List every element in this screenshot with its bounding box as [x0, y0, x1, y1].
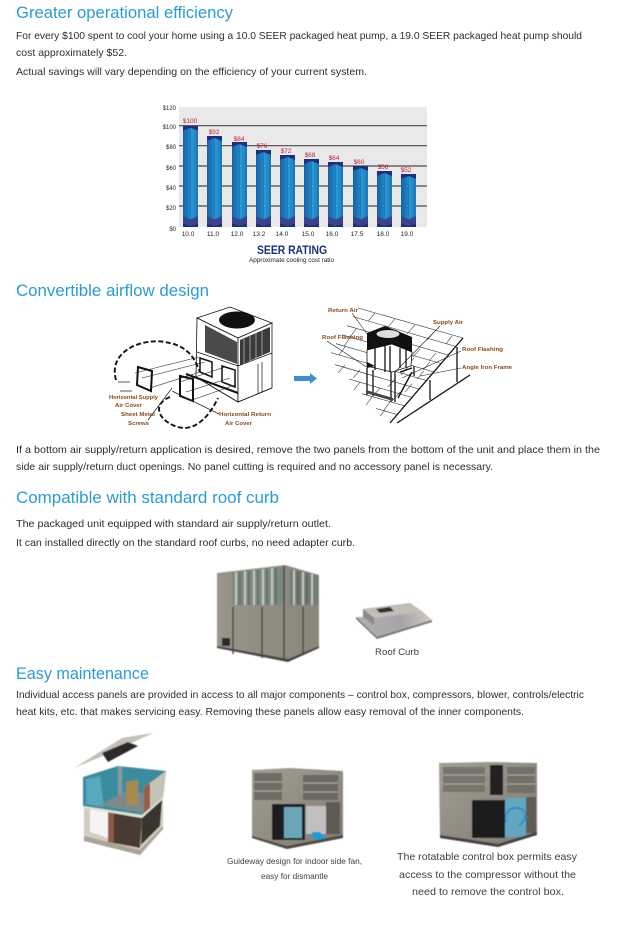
- x axis labels: 10.0: [182, 231, 195, 238]
- caption: guideway design: easy for dismantle: [261, 871, 328, 881]
- y axis labels: $40: [166, 186, 177, 192]
- caption: Roof Curb: Roof Curb: [375, 647, 419, 658]
- heading: Compatible with standard roof curb: Compatible with standard roof curb: [16, 488, 279, 507]
- bars: [183, 126, 416, 227]
- y axis labels: $100: [163, 125, 177, 131]
- bar value labels: $64: [329, 155, 340, 162]
- diagram: unit with removable panels: [115, 307, 272, 428]
- labels: panel diagram: Air Cover: [225, 421, 253, 427]
- photo: guideway fan unit: [252, 768, 343, 849]
- labels: panel diagram: Horizontal Return: [219, 412, 272, 418]
- labels: panel diagram: Horizontal Supply: [109, 395, 159, 401]
- text block: roof curb compatibility: The packaged unit equipped with standard air supply/return outlet.: [16, 518, 331, 530]
- caption: rotatable control box: access to the compressor without the: [399, 869, 576, 881]
- photo: packaged unit: [217, 565, 319, 662]
- labels: panel diagram: Screws: [128, 421, 149, 427]
- x axis labels: 13.2: [253, 231, 266, 238]
- text block: conversion explanation: If a bottom air supply/return application is desired, remove the two panels from the bottom of the unit and place them in the: [16, 444, 600, 456]
- heading: Convertible airflow design: Convertible airflow design: [16, 281, 209, 300]
- text block: maintenance intro: heat kits, etc. that makes servicing easy. Removing these panels allow easy removal of the inner components.: [16, 706, 524, 718]
- bar value labels: $92: [209, 129, 220, 136]
- y axis labels: $0: [169, 227, 177, 233]
- x axis labels: 16.0: [326, 231, 339, 238]
- x axis labels: [182, 231, 414, 238]
- bar value labels: $52: [401, 167, 412, 174]
- x axis labels: 17.5: [351, 231, 364, 238]
- y axis labels: $80: [166, 145, 177, 151]
- bar value labels: $100: [183, 118, 198, 125]
- y axis labels: $20: [166, 206, 177, 212]
- labels: panel diagram: Air Cover: [115, 403, 143, 409]
- text block: conversion explanation: side air supply/return duct openings. No panel cutting is required and no accessory panel is necessary.: [16, 461, 493, 473]
- bar value labels: $72: [281, 148, 292, 155]
- diagram: unit on pitched roof: [327, 308, 470, 423]
- text block: efficiency intro: [16, 30, 582, 78]
- text block: roof curb compatibility: [16, 518, 355, 549]
- text block: efficiency intro: cost approximately $52.: [16, 47, 127, 59]
- x axis labels: 11.0: [207, 231, 219, 238]
- bar value labels: $68: [305, 152, 316, 159]
- text block: conversion explanation: [16, 444, 600, 473]
- photo: open unit cutaway: [74, 733, 166, 855]
- labels: roof diagram: [322, 308, 512, 371]
- y axis labels: [163, 106, 177, 233]
- labels: panel diagram: Sheet Metal: [121, 412, 155, 418]
- axis title: SEER RATING: [257, 243, 327, 257]
- y axis labels: $120: [163, 106, 177, 112]
- labels: roof diagram: Return Air: [328, 308, 359, 314]
- heading: Greater operational efficiency: Greater operational efficiency: [16, 3, 233, 22]
- caption: rotatable control box: The rotatable control box permits easy: [397, 851, 578, 863]
- text block: maintenance intro: [16, 689, 584, 718]
- caption: rotatable control box: need to remove the control box.: [412, 886, 564, 898]
- labels: panel diagram: [109, 395, 272, 427]
- labels: roof diagram: Angle Iron Frame: [462, 365, 512, 371]
- labels: roof diagram: Roof Flashing: [322, 335, 364, 341]
- photo: roof curb: [356, 603, 432, 639]
- x axis labels: 12.0: [231, 231, 244, 238]
- caption: guideway design: [227, 856, 362, 881]
- text block: maintenance intro: Individual access panels are provided in access to all major components – control box, compressors, blower, controls/electric: [16, 689, 584, 701]
- bar value labels: $56: [378, 164, 389, 171]
- photo: rotatable control box unit: [439, 762, 537, 847]
- bar value labels: $84: [234, 136, 245, 143]
- bar value labels: $60: [354, 159, 365, 166]
- labels: roof diagram: Roof Flashing: [462, 347, 504, 353]
- y axis labels: $60: [166, 166, 177, 172]
- labels: roof diagram: Supply Air: [433, 320, 464, 326]
- bar value labels: [183, 118, 412, 174]
- caption: rotatable control box: [397, 851, 578, 898]
- x axis labels: 14.0: [276, 231, 289, 238]
- heading: Easy maintenance: Easy maintenance: [16, 664, 149, 683]
- bar value labels: $76: [257, 143, 268, 150]
- axis subtitle: Approximate cooling cost ratio: [249, 258, 335, 264]
- text block: efficiency intro: Actual savings will vary depending on the efficiency of your current system.: [16, 66, 367, 78]
- x axis labels: 18.0: [377, 231, 390, 238]
- text block: efficiency intro: For every $100 spent to cool your home using a 10.0 SEER packaged heat pump, a 19.0 SEER packaged heat pump should: [16, 30, 582, 42]
- x axis labels: 19.0: [401, 231, 414, 238]
- x axis labels: 15.0: [302, 231, 315, 238]
- arrow: conversion: [294, 373, 317, 384]
- caption: guideway design: Guideway design for indoor side fan,: [227, 856, 362, 866]
- bar chart: cost by SEER rating: [163, 106, 427, 264]
- text block: roof curb compatibility: It can installed directly on the standard roof curbs, no need adapter curb.: [16, 537, 355, 549]
